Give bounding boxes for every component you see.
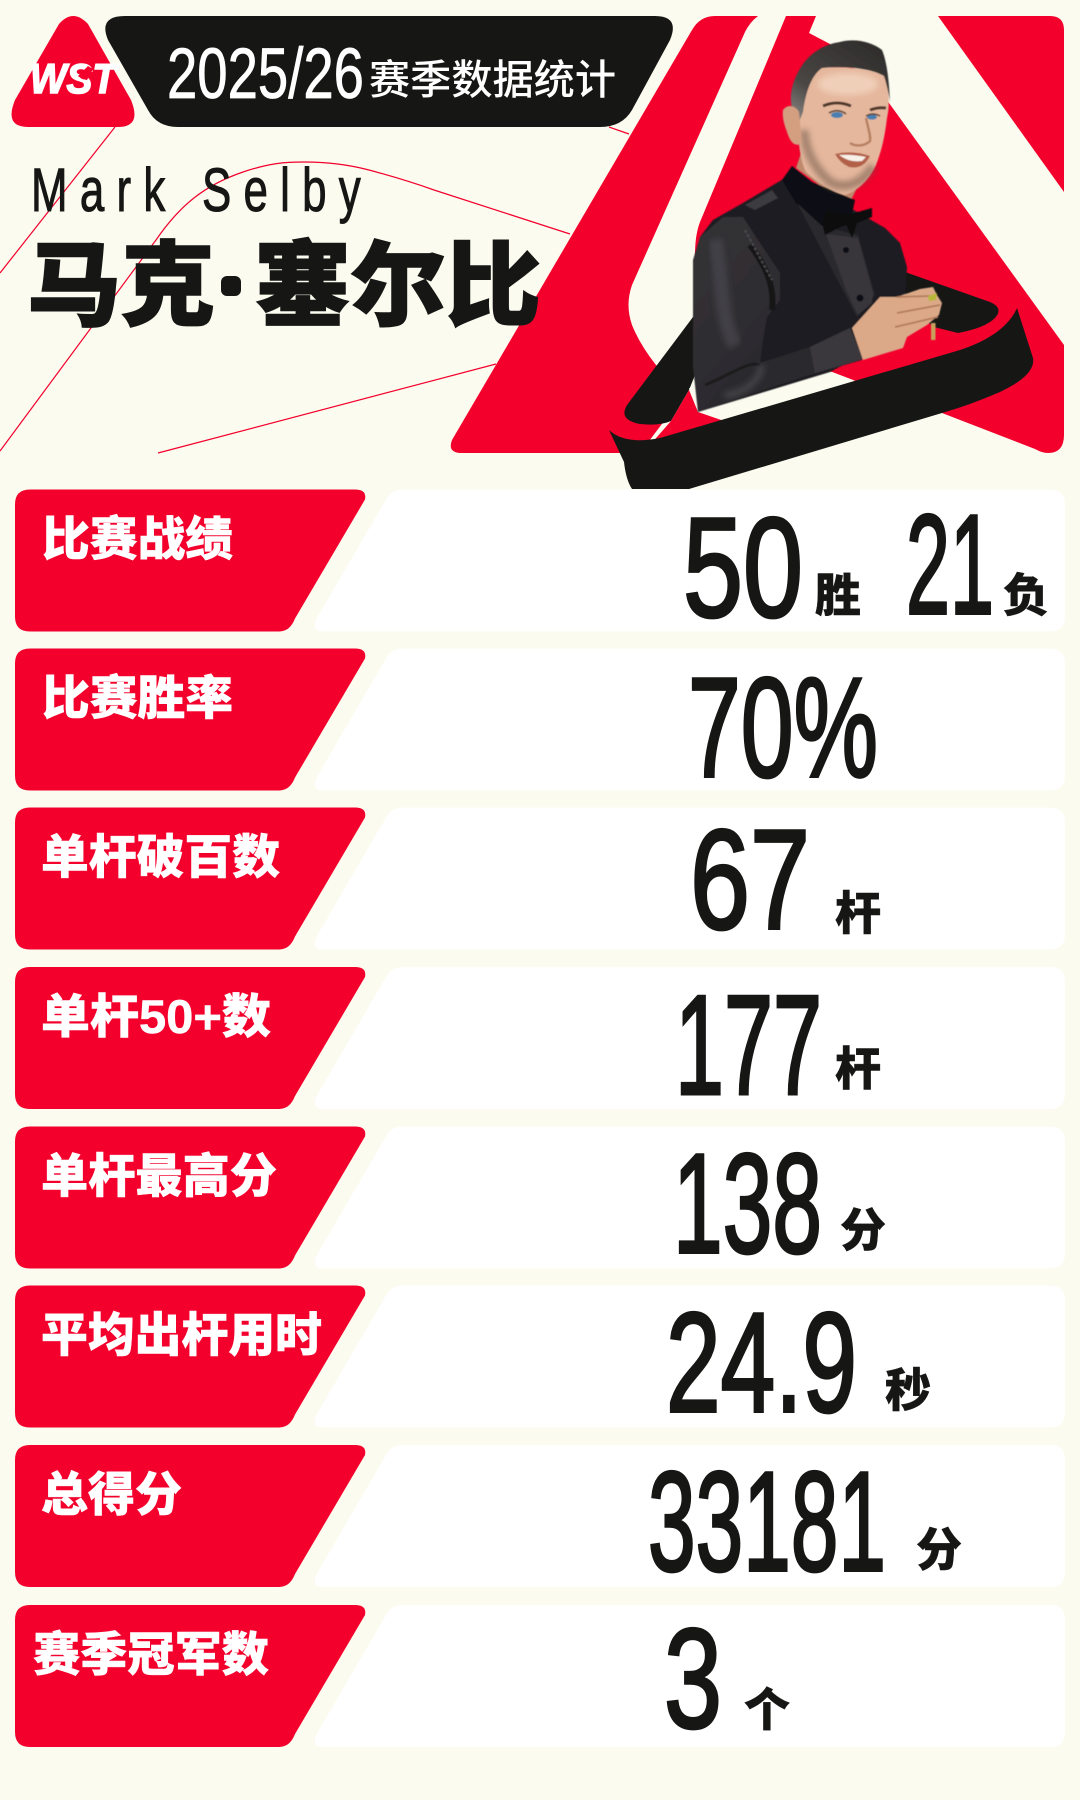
shoulder stitching <box>745 190 778 210</box>
value: 3 <box>664 1600 722 1758</box>
ear <box>783 106 802 145</box>
torso vest <box>693 178 907 412</box>
losses value: 21 <box>906 486 994 644</box>
stubble <box>804 130 873 185</box>
wins value: 50 <box>683 488 803 648</box>
cuff <box>810 328 863 373</box>
label: 比赛战绩 <box>42 512 233 566</box>
red shape left <box>451 16 758 453</box>
shirt buttons <box>843 247 864 302</box>
label: 赛季冠军数 <box>33 1628 269 1681</box>
english name: Mark Selby <box>31 157 361 225</box>
unit: 杆 <box>835 888 881 940</box>
nose <box>850 118 870 145</box>
label: 单杆最高分 <box>41 1150 277 1202</box>
value: 33181 <box>648 1442 886 1602</box>
row: 平均出杆用时 <box>15 1284 1065 1442</box>
title banner <box>105 16 673 127</box>
row: 总得分 <box>15 1442 1065 1602</box>
sleeve <box>693 217 862 412</box>
row: 单杆破百数 <box>15 800 1065 960</box>
label: 比赛胜率 <box>42 672 233 724</box>
small red corner <box>650 390 724 445</box>
chinese name: 塞尔比 <box>255 236 541 338</box>
label: 单杆50+数 <box>41 990 271 1043</box>
hair <box>791 40 890 122</box>
decorative thin red lines <box>0 127 629 453</box>
logo: WST triangle: WST <box>30 55 119 102</box>
unit: 个 <box>744 1684 790 1736</box>
losses unit: 负 <box>1003 570 1049 622</box>
row: 赛季冠军数 <box>15 1600 1065 1758</box>
banner subtitle: 赛季数据统计 <box>369 57 616 103</box>
chinese name: 马克 <box>27 236 215 338</box>
neck <box>796 150 862 206</box>
shirt front <box>797 203 875 317</box>
row: 比赛战绩 <box>15 486 1065 648</box>
hero graphic: triangle rack and player <box>451 16 1064 489</box>
logo: WST triangle <box>12 16 134 127</box>
sleeve highlights and folds <box>705 230 773 395</box>
red shape top right <box>938 16 1064 192</box>
unit: 分 <box>916 1524 962 1576</box>
row: 单杆最高分 <box>15 1124 1065 1284</box>
unit: 秒 <box>885 1364 931 1416</box>
wins unit: 胜 <box>815 570 861 622</box>
rack inner left black <box>624 310 705 425</box>
finger lines <box>895 296 940 327</box>
chalk tip <box>931 323 936 340</box>
row: 单杆50+数 <box>15 966 1065 1125</box>
label: 总得分 <box>41 1468 182 1521</box>
eyes <box>829 111 880 120</box>
rack front band <box>609 308 1033 489</box>
value: 177 <box>675 966 822 1125</box>
row: 比赛胜率 <box>15 648 1065 808</box>
red shape center <box>695 16 1064 453</box>
player <box>693 40 942 412</box>
value: 138 <box>673 1124 822 1284</box>
shirt collar <box>782 166 855 232</box>
value: 70% <box>688 648 878 808</box>
unit: 杆 <box>835 1043 881 1095</box>
chinese name <box>27 236 541 338</box>
eyebrows <box>823 103 886 110</box>
rack inner wedge <box>900 272 999 333</box>
label: 平均出杆用时 <box>41 1308 322 1362</box>
banner year: 2025/26 <box>167 35 364 114</box>
face <box>797 67 889 195</box>
label: 单杆破百数 <box>41 830 280 884</box>
value: 67 <box>690 800 810 960</box>
bow tie <box>822 208 872 238</box>
cream strip <box>705 372 853 419</box>
value: 24.9 <box>666 1284 857 1442</box>
mouth <box>835 152 870 168</box>
hand <box>852 287 942 360</box>
unit: 分 <box>840 1204 886 1256</box>
forehead highlight <box>818 73 878 95</box>
